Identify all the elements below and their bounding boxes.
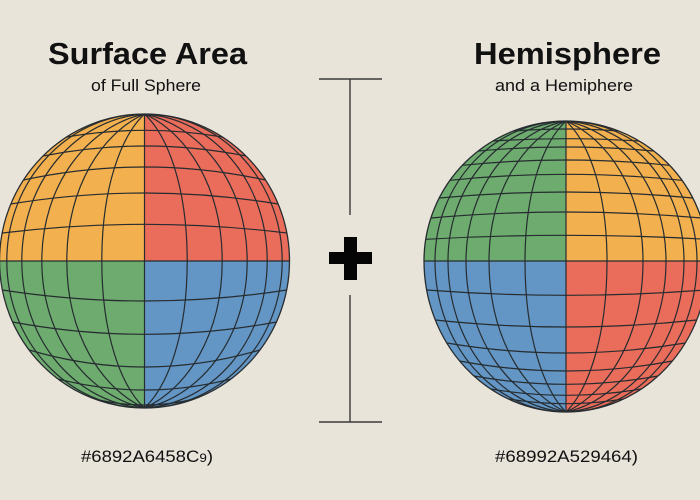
bracket: upper divider <box>319 79 382 215</box>
caption: right hex code: #68992A529464) <box>495 448 638 466</box>
caption: left hex code: #6892A6458C 9) <box>81 448 213 466</box>
subtitle: of Full Sphere: of Full Sphere <box>91 76 201 95</box>
subtitle: and a Hemiphere: and a Hemiphere <box>495 76 633 95</box>
title: Hemisphere: Hemisphere <box>474 36 661 71</box>
right sphere: hemisphere <box>423 120 700 413</box>
bracket: lower divider <box>319 295 382 422</box>
icon: plus sign <box>329 237 372 280</box>
left sphere: full sphere <box>0 113 290 409</box>
title: Surface Area: Surface Area <box>48 36 248 71</box>
